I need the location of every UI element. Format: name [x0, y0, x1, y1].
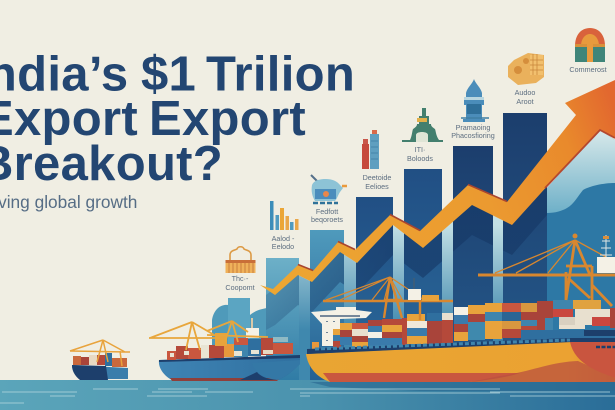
containers aft	[333, 313, 453, 348]
label: temple	[451, 123, 495, 140]
label: crate: Aroot	[516, 97, 534, 106]
label: bar chart: Eelodo	[272, 242, 294, 251]
icon: round machine	[311, 175, 347, 203]
title: Trilion	[206, 48, 355, 102]
icon: commerce building	[575, 28, 605, 62]
large cargo ship	[306, 234, 615, 382]
containers mid	[454, 301, 553, 341]
label: gateway: Boloods	[407, 154, 433, 163]
label: machine: beqoroets	[311, 215, 343, 224]
title: $1	[141, 48, 196, 102]
label: temple: Phacosfioring	[451, 131, 495, 140]
label: towers	[363, 173, 391, 191]
icon: trade basket	[226, 247, 256, 273]
label: bar chart	[272, 234, 295, 251]
label: gateway	[407, 145, 433, 163]
label: machine	[311, 207, 343, 224]
arrow: growth trend	[260, 80, 615, 295]
label: trade	[225, 274, 255, 292]
ship bridge	[311, 307, 372, 349]
containers fore	[521, 300, 615, 341]
hull	[306, 338, 615, 382]
label: towers: Eelioes	[365, 182, 389, 191]
icon: towers	[362, 130, 379, 169]
bar shadows under arrow	[266, 180, 547, 330]
small cargo ship	[70, 340, 130, 380]
ship mast	[597, 235, 615, 273]
title: Export	[149, 92, 306, 146]
label: bar chart: Aalod -	[272, 234, 295, 243]
label: crate: Audoo	[515, 88, 535, 97]
title	[0, 48, 355, 191]
label: temple: Pramaoing	[456, 123, 490, 132]
label: towers: Deetoide	[363, 173, 391, 182]
label: machine: Fedfott	[316, 207, 338, 216]
label: commerce: Commerost	[569, 65, 607, 74]
medium cargo ship	[149, 318, 300, 381]
icon: blue temple	[461, 79, 489, 122]
crane: foreground	[478, 234, 615, 306]
crane: midship	[323, 277, 453, 320]
label: trade: Thc·-	[232, 274, 249, 283]
label: crate	[515, 88, 535, 106]
panel: rising bars	[212, 113, 615, 382]
label: gateway: ITI·	[415, 145, 425, 154]
label: trade: Coopomt	[225, 283, 255, 292]
icon: crate cubes	[508, 53, 544, 85]
icon: mini bar chart	[270, 201, 298, 230]
icon: green gateway	[402, 108, 443, 142]
water	[0, 380, 615, 410]
